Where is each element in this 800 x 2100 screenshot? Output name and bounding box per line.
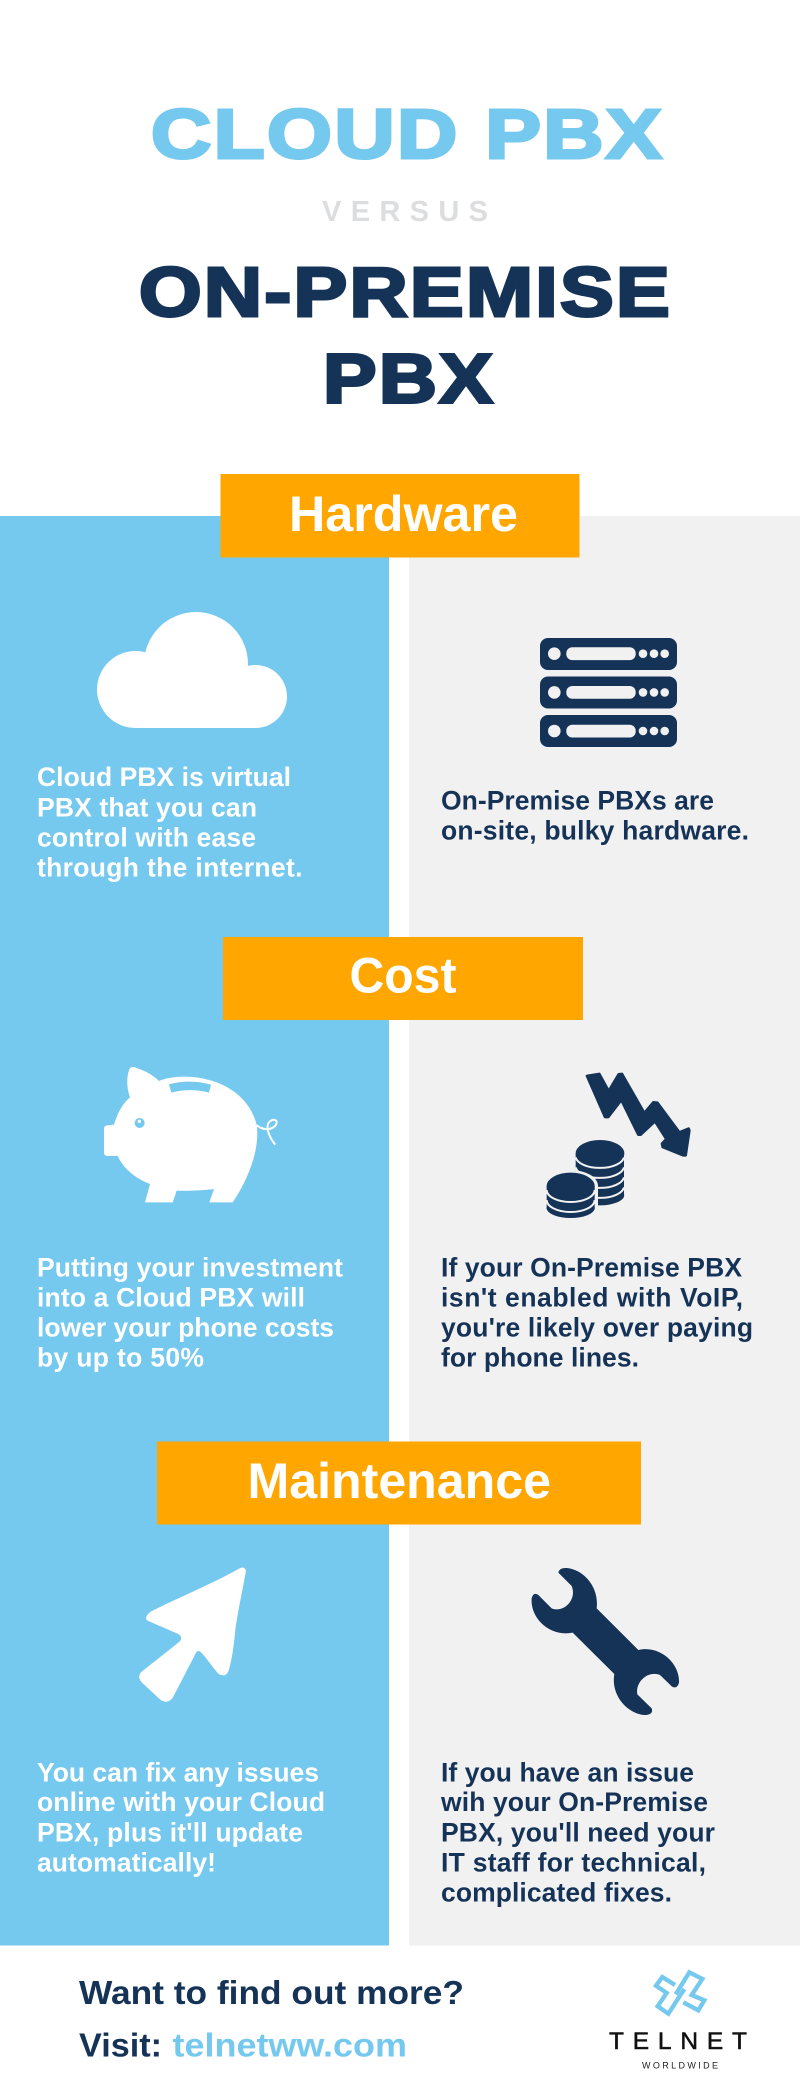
title	[139, 95, 672, 418]
text: cloud hardware: control with ease	[37, 822, 256, 852]
title: On-Premise PBX: PBX	[323, 340, 495, 418]
text: on-premise maintenance	[440, 1757, 715, 1907]
text: cloud hardware: through the internet.	[37, 852, 302, 882]
text: cloud maintenance: PBX, plus it'll update	[37, 1818, 303, 1848]
title: On-Premise PBX: ON-PREMISE	[139, 253, 672, 331]
panel: cloud column	[0, 516, 389, 1946]
panel: on-premise column	[409, 516, 800, 1946]
heading: Maintenance	[157, 1442, 641, 1524]
front coin stack	[544, 1186, 598, 1209]
text: on-premise cost	[441, 1252, 753, 1372]
heading: Hardware: Hardware	[289, 486, 518, 542]
call to action: Want to find out more?	[79, 1974, 464, 2011]
heading: Cost: Cost	[350, 947, 457, 1003]
call to action: Visit:	[79, 2027, 162, 2064]
text: cloud cost: Putting your investment	[37, 1252, 343, 1282]
text: on-premise maintenance: complicated fixes.	[441, 1877, 672, 1907]
heading: Cost	[223, 937, 583, 1020]
icon: server rack	[540, 638, 677, 747]
text: on-premise maintenance: IT staff for technical,	[441, 1847, 706, 1877]
text: on-premise hardware: On-Premise PBXs are	[441, 785, 714, 815]
logo: Telnet Worldwide: WORLDWIDE	[642, 2060, 718, 2070]
call to action: telnetww.com	[172, 2027, 407, 2064]
text: cloud cost	[37, 1252, 343, 1372]
heading: Maintenance: Maintenance	[248, 1453, 551, 1509]
text: cloud cost: by up to 50%	[37, 1342, 204, 1372]
text: cloud hardware	[37, 762, 302, 882]
text: cloud hardware: PBX that you can	[37, 792, 257, 822]
text: cloud maintenance: automatically!	[37, 1847, 216, 1877]
text: on-premise hardware	[441, 785, 749, 846]
icon: wrench	[532, 1568, 679, 1715]
logo: Telnet Worldwide	[609, 1972, 747, 2070]
icon: piggy bank	[104, 1067, 277, 1202]
text: on-premise maintenance: PBX, you'll need your	[441, 1818, 715, 1848]
call to action	[79, 1974, 464, 2064]
text: cloud maintenance: You can fix any issues	[37, 1757, 319, 1787]
text: on-premise cost: isn't enabled with VoIP,	[441, 1282, 743, 1312]
text: on-premise maintenance: wih your On-Premise	[440, 1787, 708, 1817]
icon: falling chart and coins	[543, 1074, 689, 1218]
logo mark	[656, 1972, 704, 2014]
text: cloud cost: into a Cloud PBX will	[37, 1282, 305, 1312]
text: cloud maintenance	[37, 1757, 325, 1877]
text: on-premise hardware: on-site, bulky hardware.	[441, 816, 749, 846]
title: Cloud PBX: CLOUD PBX	[151, 95, 664, 173]
text: on-premise cost: for phone lines.	[441, 1342, 639, 1372]
title: versus: VERSUS	[322, 196, 488, 228]
icon: cloud	[97, 612, 287, 728]
icon: cursor arrow	[139, 1568, 246, 1702]
text: cloud maintenance: online with your Cloud	[37, 1787, 325, 1817]
text: cloud hardware: Cloud PBX is virtual	[37, 762, 291, 792]
text: on-premise cost: If your On-Premise PBX	[441, 1252, 742, 1282]
text: on-premise cost: you're likely over paying	[441, 1313, 753, 1343]
back coin stack	[576, 1153, 624, 1197]
heading: Hardware	[220, 474, 580, 558]
falling arrow	[587, 1074, 689, 1155]
text: cloud cost: lower your phone costs	[37, 1313, 334, 1343]
logo: Telnet Worldwide: TELNET	[609, 2028, 747, 2055]
text: on-premise maintenance: If you have an issue	[441, 1757, 694, 1787]
title: On-Premise PBX	[139, 253, 672, 418]
